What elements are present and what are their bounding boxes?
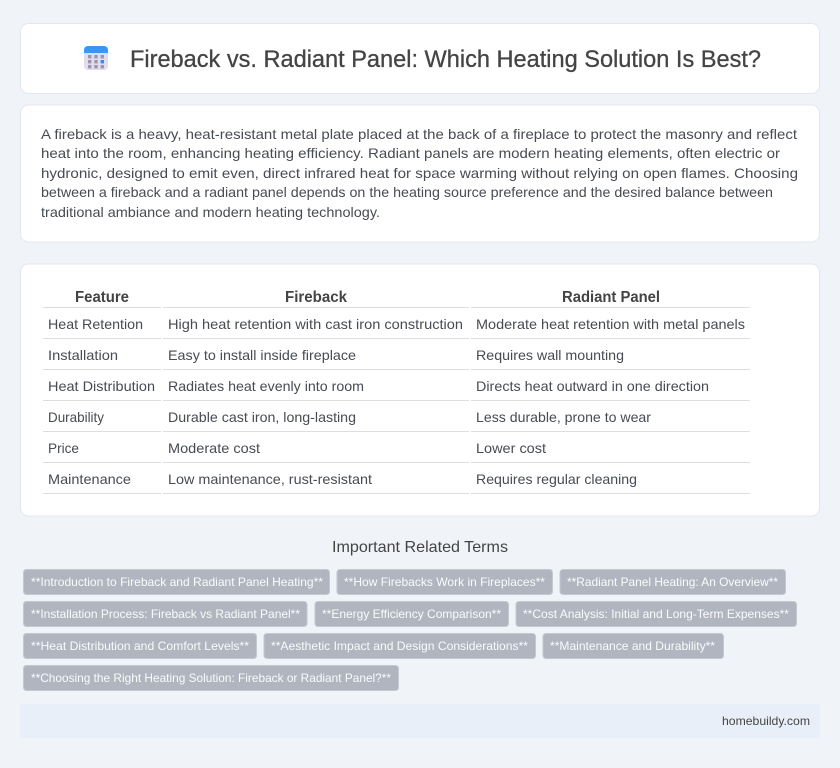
- tag: **Choosing the Right Heating Solution: Fireback or Radiant Panel?**: [31, 671, 391, 685]
- tag: **Maintenance and Durability**: [550, 639, 715, 653]
- row: heat distribution: Radiates heat evenly into room: [168, 378, 364, 394]
- tag: [264, 634, 536, 658]
- text block: intro paragraph: A fireback is a heavy, heat-resistant metal plate placed at the back of a fireplace to protect the masonry and reflect: [41, 126, 797, 142]
- row: installation: Installation: [48, 347, 118, 363]
- text block: intro paragraph: [41, 126, 798, 220]
- text block: intro paragraph: heat into the room, enhancing heating efficiency. Radiant panels are modern heating elements, often electric or: [41, 145, 780, 161]
- text block: intro paragraph: traditional ambiance and modern heating technology.: [41, 204, 380, 220]
- tag: [543, 634, 724, 658]
- panel: comparison table: [20, 264, 820, 516]
- row: installation: Requires wall mounting: [476, 347, 624, 363]
- row: heat retention: High heat retention with cast iron construction: [168, 316, 463, 332]
- row: price: Price: [48, 440, 79, 456]
- row: heat distribution: Directs heat outward in one direction: [476, 378, 709, 394]
- title: Fireback vs. Radiant Panel: Which Heating Solution Is Best?: [130, 46, 761, 73]
- table header: [75, 289, 660, 306]
- tag: **Radiant Panel Heating: An Overview**: [567, 575, 778, 589]
- tag: **Cost Analysis: Initial and Long-Term Expenses**: [523, 607, 789, 621]
- row: maintenance: [48, 471, 637, 487]
- tag: **Introduction to Fireback and Radiant Panel Heating**: [31, 575, 323, 589]
- tag: **Installation Process: Fireback vs Radiant Panel**: [31, 607, 300, 621]
- tag: **Aesthetic Impact and Design Considerations**: [271, 639, 528, 653]
- tag: **Energy Efficiency Comparison**: [322, 607, 501, 621]
- tag: [24, 666, 398, 690]
- row: maintenance: Low maintenance, rust-resistant: [168, 471, 372, 487]
- icon: calendar: [84, 46, 108, 70]
- tag: [24, 570, 330, 594]
- row: heat distribution: [48, 378, 709, 394]
- row: maintenance: Maintenance: [48, 471, 131, 487]
- row: durability: Durability: [48, 409, 104, 425]
- footer source text: homebuildy.com: [722, 714, 810, 728]
- panel: header: [20, 24, 820, 94]
- row: durability: [48, 409, 651, 425]
- row: heat distribution: Heat Distribution: [48, 378, 155, 394]
- footer: [20, 704, 820, 738]
- row: heat retention: Heat Retention: [48, 316, 143, 332]
- row: heat retention: [48, 316, 745, 332]
- row: installation: Easy to install inside fireplace: [168, 347, 356, 363]
- row: installation: [48, 347, 624, 363]
- tag: [315, 602, 508, 626]
- panel: introduction: [20, 105, 820, 242]
- row: durability: Less durable, prone to wear: [476, 409, 651, 425]
- row: maintenance: Requires regular cleaning: [476, 471, 637, 487]
- tag: [516, 602, 796, 626]
- table header: Fireback: [285, 289, 347, 306]
- tag: **How Firebacks Work in Fireplaces**: [344, 575, 545, 589]
- row: price: [48, 440, 546, 456]
- table header: Radiant Panel: [562, 289, 660, 306]
- text block: intro paragraph: between a fireback and a radiant panel depends on the heating source preference and the desired balance between: [41, 184, 773, 200]
- text block: intro paragraph: hydronic, designed to emit even, direct infrared heat for space warming without relying on open flames. Choosing: [41, 165, 798, 181]
- tag: [337, 570, 552, 594]
- row: heat retention: Moderate heat retention with metal panels: [476, 316, 745, 332]
- row: price: Lower cost: [476, 440, 546, 456]
- tag: [24, 602, 307, 626]
- related terms tags: [24, 570, 796, 690]
- tag: [24, 634, 256, 658]
- row: durability: Durable cast iron, long-lasting: [168, 409, 356, 425]
- tag: [560, 570, 786, 594]
- heading: important related terms: Important Related Terms: [332, 539, 508, 556]
- row: price: Moderate cost: [168, 440, 260, 456]
- table header: Feature: [75, 289, 129, 306]
- tag: **Heat Distribution and Comfort Levels**: [31, 639, 249, 653]
